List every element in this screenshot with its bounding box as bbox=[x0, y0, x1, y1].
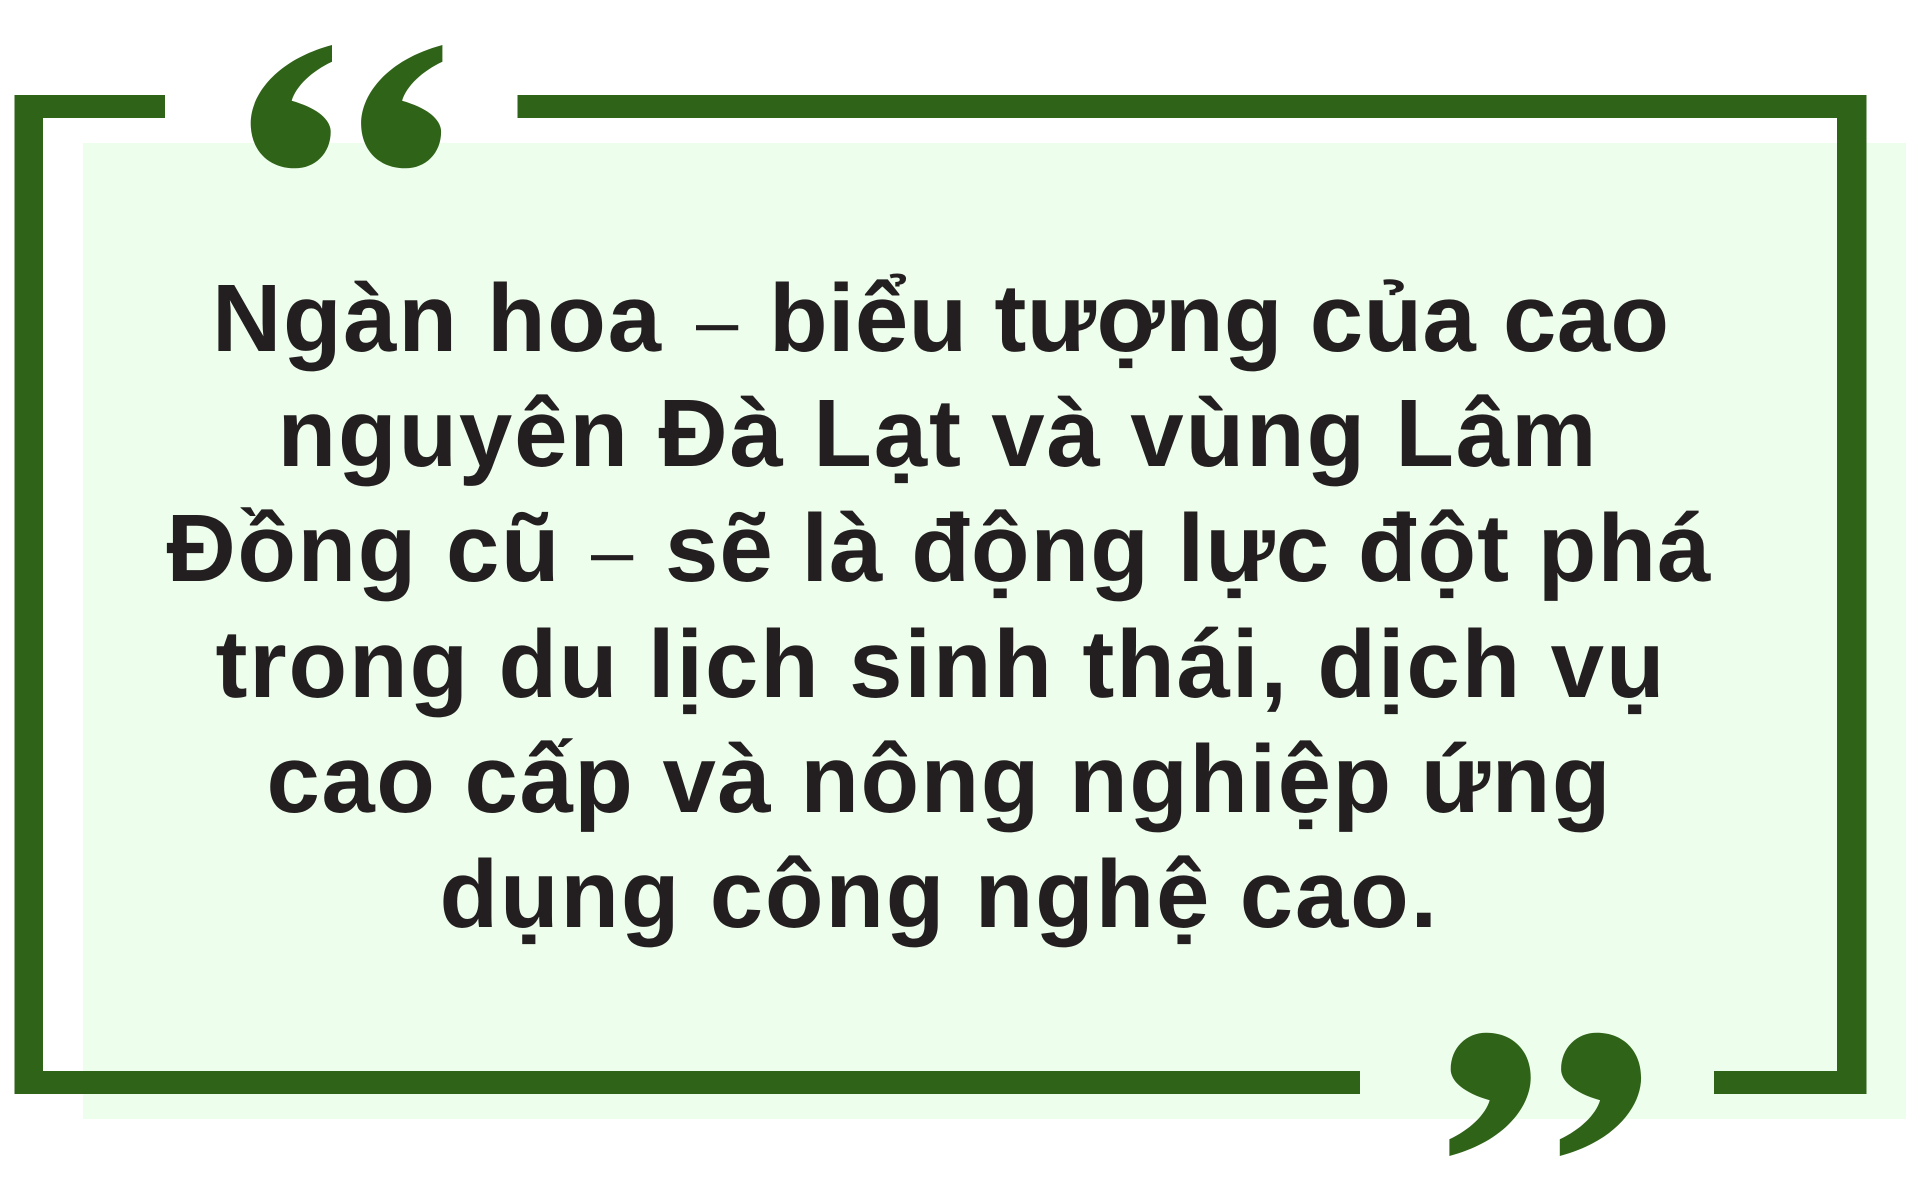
quote text: – bbox=[591, 509, 634, 594]
quote text: – bbox=[696, 279, 739, 364]
icon: closing quotation marks bbox=[1449, 1033, 1641, 1156]
quote text: cao cấp và nông nghiệp ứng bbox=[266, 726, 1610, 833]
quote text: Đồng cũ bbox=[166, 495, 560, 602]
quote text: dụng công nghệ cao. bbox=[440, 841, 1437, 948]
panel: pale green background bbox=[83, 143, 1906, 1119]
quote text: nguyên Đà Lạt và vùng Lâm bbox=[278, 380, 1596, 487]
icon: opening quotation marks bbox=[251, 45, 442, 168]
quote text: Ngàn hoa bbox=[212, 265, 662, 372]
quote text: sẽ là động lực đột phá bbox=[665, 495, 1711, 602]
quote text: trong du lịch sinh thái, dịch vụ bbox=[216, 611, 1664, 718]
quote text bbox=[166, 265, 1711, 948]
quote text: biểu tượng của cao bbox=[769, 265, 1669, 372]
